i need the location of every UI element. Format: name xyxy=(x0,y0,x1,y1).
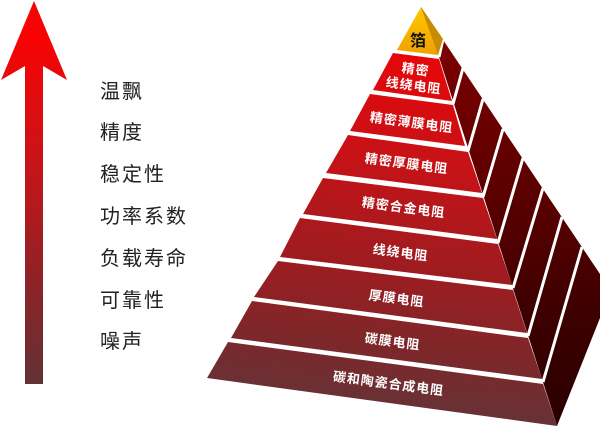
tier: thick film xyxy=(254,261,527,333)
tier: precision wirewound: 线绕电阻 xyxy=(385,74,442,97)
tier: carbon and ceramic composite xyxy=(207,342,557,426)
list of performance attributes xyxy=(100,80,188,353)
tier: wirewound: 线绕电阻 xyxy=(372,241,429,264)
tier: precision alloy: 精密合金电阻 xyxy=(361,195,446,220)
label: power coefficient: 功率系数 xyxy=(100,205,188,228)
tier: wirewound xyxy=(280,218,512,285)
label: stability: 稳定性 xyxy=(100,163,166,186)
pyramid right side face xyxy=(421,7,600,426)
tier: precision wirewound: 精密 xyxy=(401,60,430,79)
tier: foil: 箔 xyxy=(410,31,426,50)
arrow: increasing performance xyxy=(1,1,67,384)
label: noise: 噪声 xyxy=(100,330,144,353)
tier: carbon and ceramic composite: 碳和陶瓷合成电阻 xyxy=(332,369,445,398)
label: load life: 负载寿命 xyxy=(100,247,188,270)
tier: precision wirewound xyxy=(373,53,452,101)
tier: foil xyxy=(397,7,443,55)
pyramid xyxy=(207,7,600,426)
label: precision: 精度 xyxy=(100,121,144,144)
tier: precision alloy xyxy=(303,178,497,239)
tier: precision thick film xyxy=(326,135,482,193)
tier: carbon film: 碳膜电阻 xyxy=(364,330,421,353)
label: temperature drift: 温飘 xyxy=(100,80,144,103)
tier: precision thin film xyxy=(350,94,465,146)
label: reliability: 可靠性 xyxy=(100,289,166,312)
tier: thick film: 厚膜电阻 xyxy=(368,287,425,310)
tier: precision thin film: 精密薄膜电阻 xyxy=(369,110,454,135)
tier: precision thick film: 精密厚膜电阻 xyxy=(364,151,449,176)
tier: carbon film xyxy=(231,301,542,379)
